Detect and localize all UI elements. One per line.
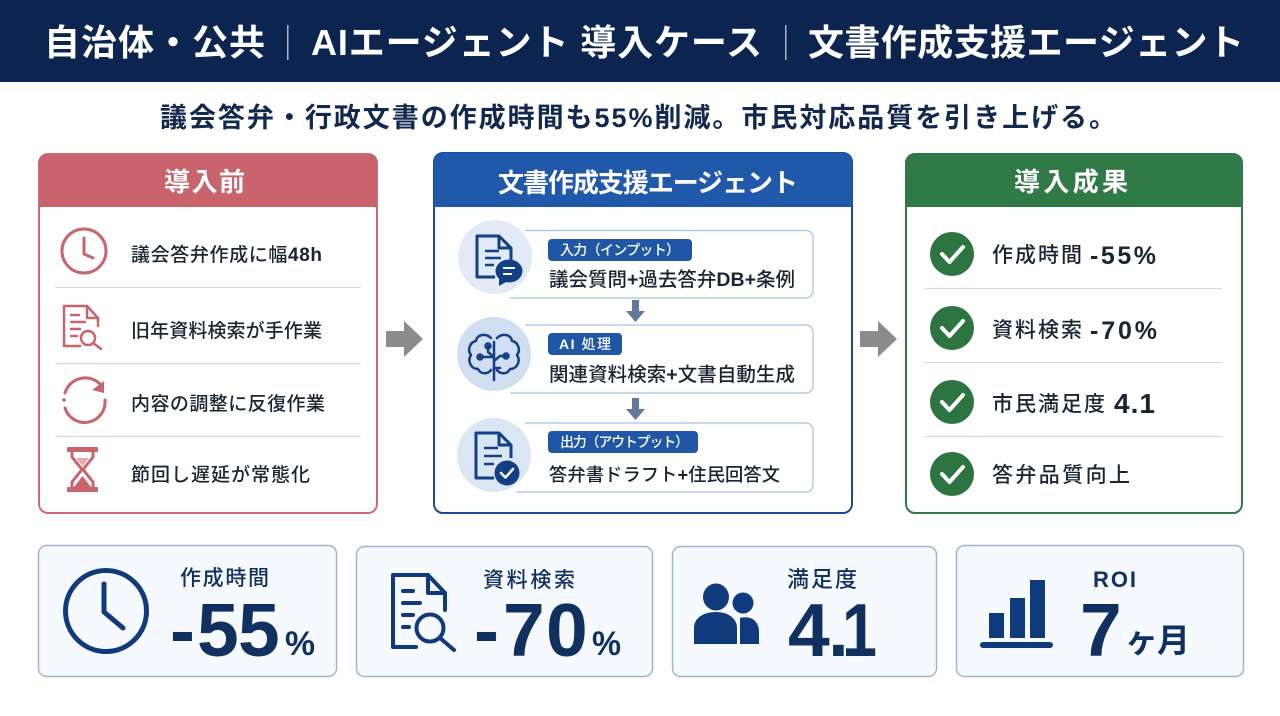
item: repeated adjustments: 内容の調整に反復作業 <box>131 393 325 415</box>
tag: output <box>548 431 698 453</box>
step: output <box>457 418 813 492</box>
KPI card: document search: 資料検索 <box>483 569 575 592</box>
KPI card: ROI <box>956 546 1244 676</box>
icon: bar chart <box>980 580 1053 648</box>
KPI card: satisfaction: 1 <box>842 588 877 672</box>
panel header: results: 導入成果 <box>1014 167 1128 197</box>
KPI card: satisfaction: 満足度 <box>787 567 857 592</box>
KPI card: document search: % <box>592 625 621 663</box>
result: answer quality <box>930 452 1130 496</box>
subtitle: 議会答弁・行政文書の作成時間も55%削減。市民対応品質を引き上げる。 <box>160 102 1116 133</box>
icon: document with check <box>476 433 520 486</box>
title banner: 文書作成支援エージェント <box>808 22 1244 63</box>
KPI card: satisfaction <box>672 546 936 676</box>
KPI card: document search <box>356 546 652 676</box>
result: citizen satisfaction: 4.1 <box>1114 388 1155 419</box>
KPI card: document search: -70 <box>474 588 588 672</box>
text: output: 答弁書ドラフト+住民回答文 <box>549 464 780 485</box>
tag: input: 入力（インプット） <box>560 242 680 258</box>
icon: document search <box>64 306 101 349</box>
result: drafting time: 作成時間 <box>992 244 1082 267</box>
icon: document with chat <box>477 236 522 286</box>
result: answer quality: 答弁品質向上 <box>992 463 1130 487</box>
panel header: before <box>39 154 377 207</box>
arrow: agent to results <box>860 321 897 357</box>
panel header: results <box>906 154 1242 207</box>
step: AI processing <box>457 317 813 393</box>
panel: results <box>906 154 1242 513</box>
tag: AI processing: AI 処理 <box>559 336 611 352</box>
KPI card: drafting time: -55 <box>170 588 280 672</box>
icon: clock <box>62 229 106 273</box>
KPI card: drafting time: 作成時間 <box>180 567 269 590</box>
item: answer drafting: 議会答弁作成に幅48h <box>131 243 322 266</box>
tag: output: 出力（アウトプット） <box>560 434 689 450</box>
arrow: input to processing <box>626 300 645 322</box>
title banner: AIエージェント 導入ケース <box>311 22 762 63</box>
result: citizen satisfaction: 市民満足度 <box>992 393 1105 416</box>
panel header: agent <box>434 153 852 207</box>
KPI card: ROI: ROI <box>1093 567 1136 592</box>
tag: AI processing <box>548 333 622 355</box>
panel: agent <box>434 153 852 513</box>
item: manual search: 旧年資料検索が手作業 <box>131 320 322 342</box>
panel header: agent: 文書作成支援エージェント <box>498 168 798 198</box>
KPI card: drafting time: % <box>285 625 315 663</box>
icon: repeat cycle <box>62 378 105 422</box>
icon: hourglass <box>67 447 98 492</box>
tag: input <box>548 239 692 261</box>
text: input: 議会質問+過去答弁DB+条例 <box>549 268 795 291</box>
text: AI processing: 関連資料検索+文書自動生成 <box>549 364 795 386</box>
arrow: processing to output <box>626 398 645 420</box>
result: document search <box>930 306 1157 350</box>
icon: people <box>694 584 759 644</box>
icon: brain circuit <box>469 335 519 380</box>
icon: document search <box>393 575 454 650</box>
result: document search: 資料検索 <box>992 319 1082 342</box>
icon: clock <box>66 570 146 652</box>
KPI card: ROI: ヶ月 <box>1125 622 1190 659</box>
panel header: before: 導入前 <box>164 167 245 197</box>
step: input <box>458 220 813 298</box>
result: citizen satisfaction <box>930 380 1155 424</box>
title banner: 自治体・公共 <box>44 22 265 63</box>
KPI card: ROI: 7 <box>1080 588 1122 672</box>
result: drafting time <box>930 232 1156 276</box>
KPI card: satisfaction: 4. <box>788 588 849 672</box>
result: document search: -70% <box>1090 317 1157 345</box>
panel: before <box>39 154 377 513</box>
KPI card: drafting time <box>38 546 336 676</box>
title banner <box>0 0 1280 82</box>
result: drafting time: -55% <box>1090 242 1156 270</box>
arrow: before to agent <box>386 321 423 357</box>
item: chronic delays: 節回し遅延が常態化 <box>131 464 310 486</box>
